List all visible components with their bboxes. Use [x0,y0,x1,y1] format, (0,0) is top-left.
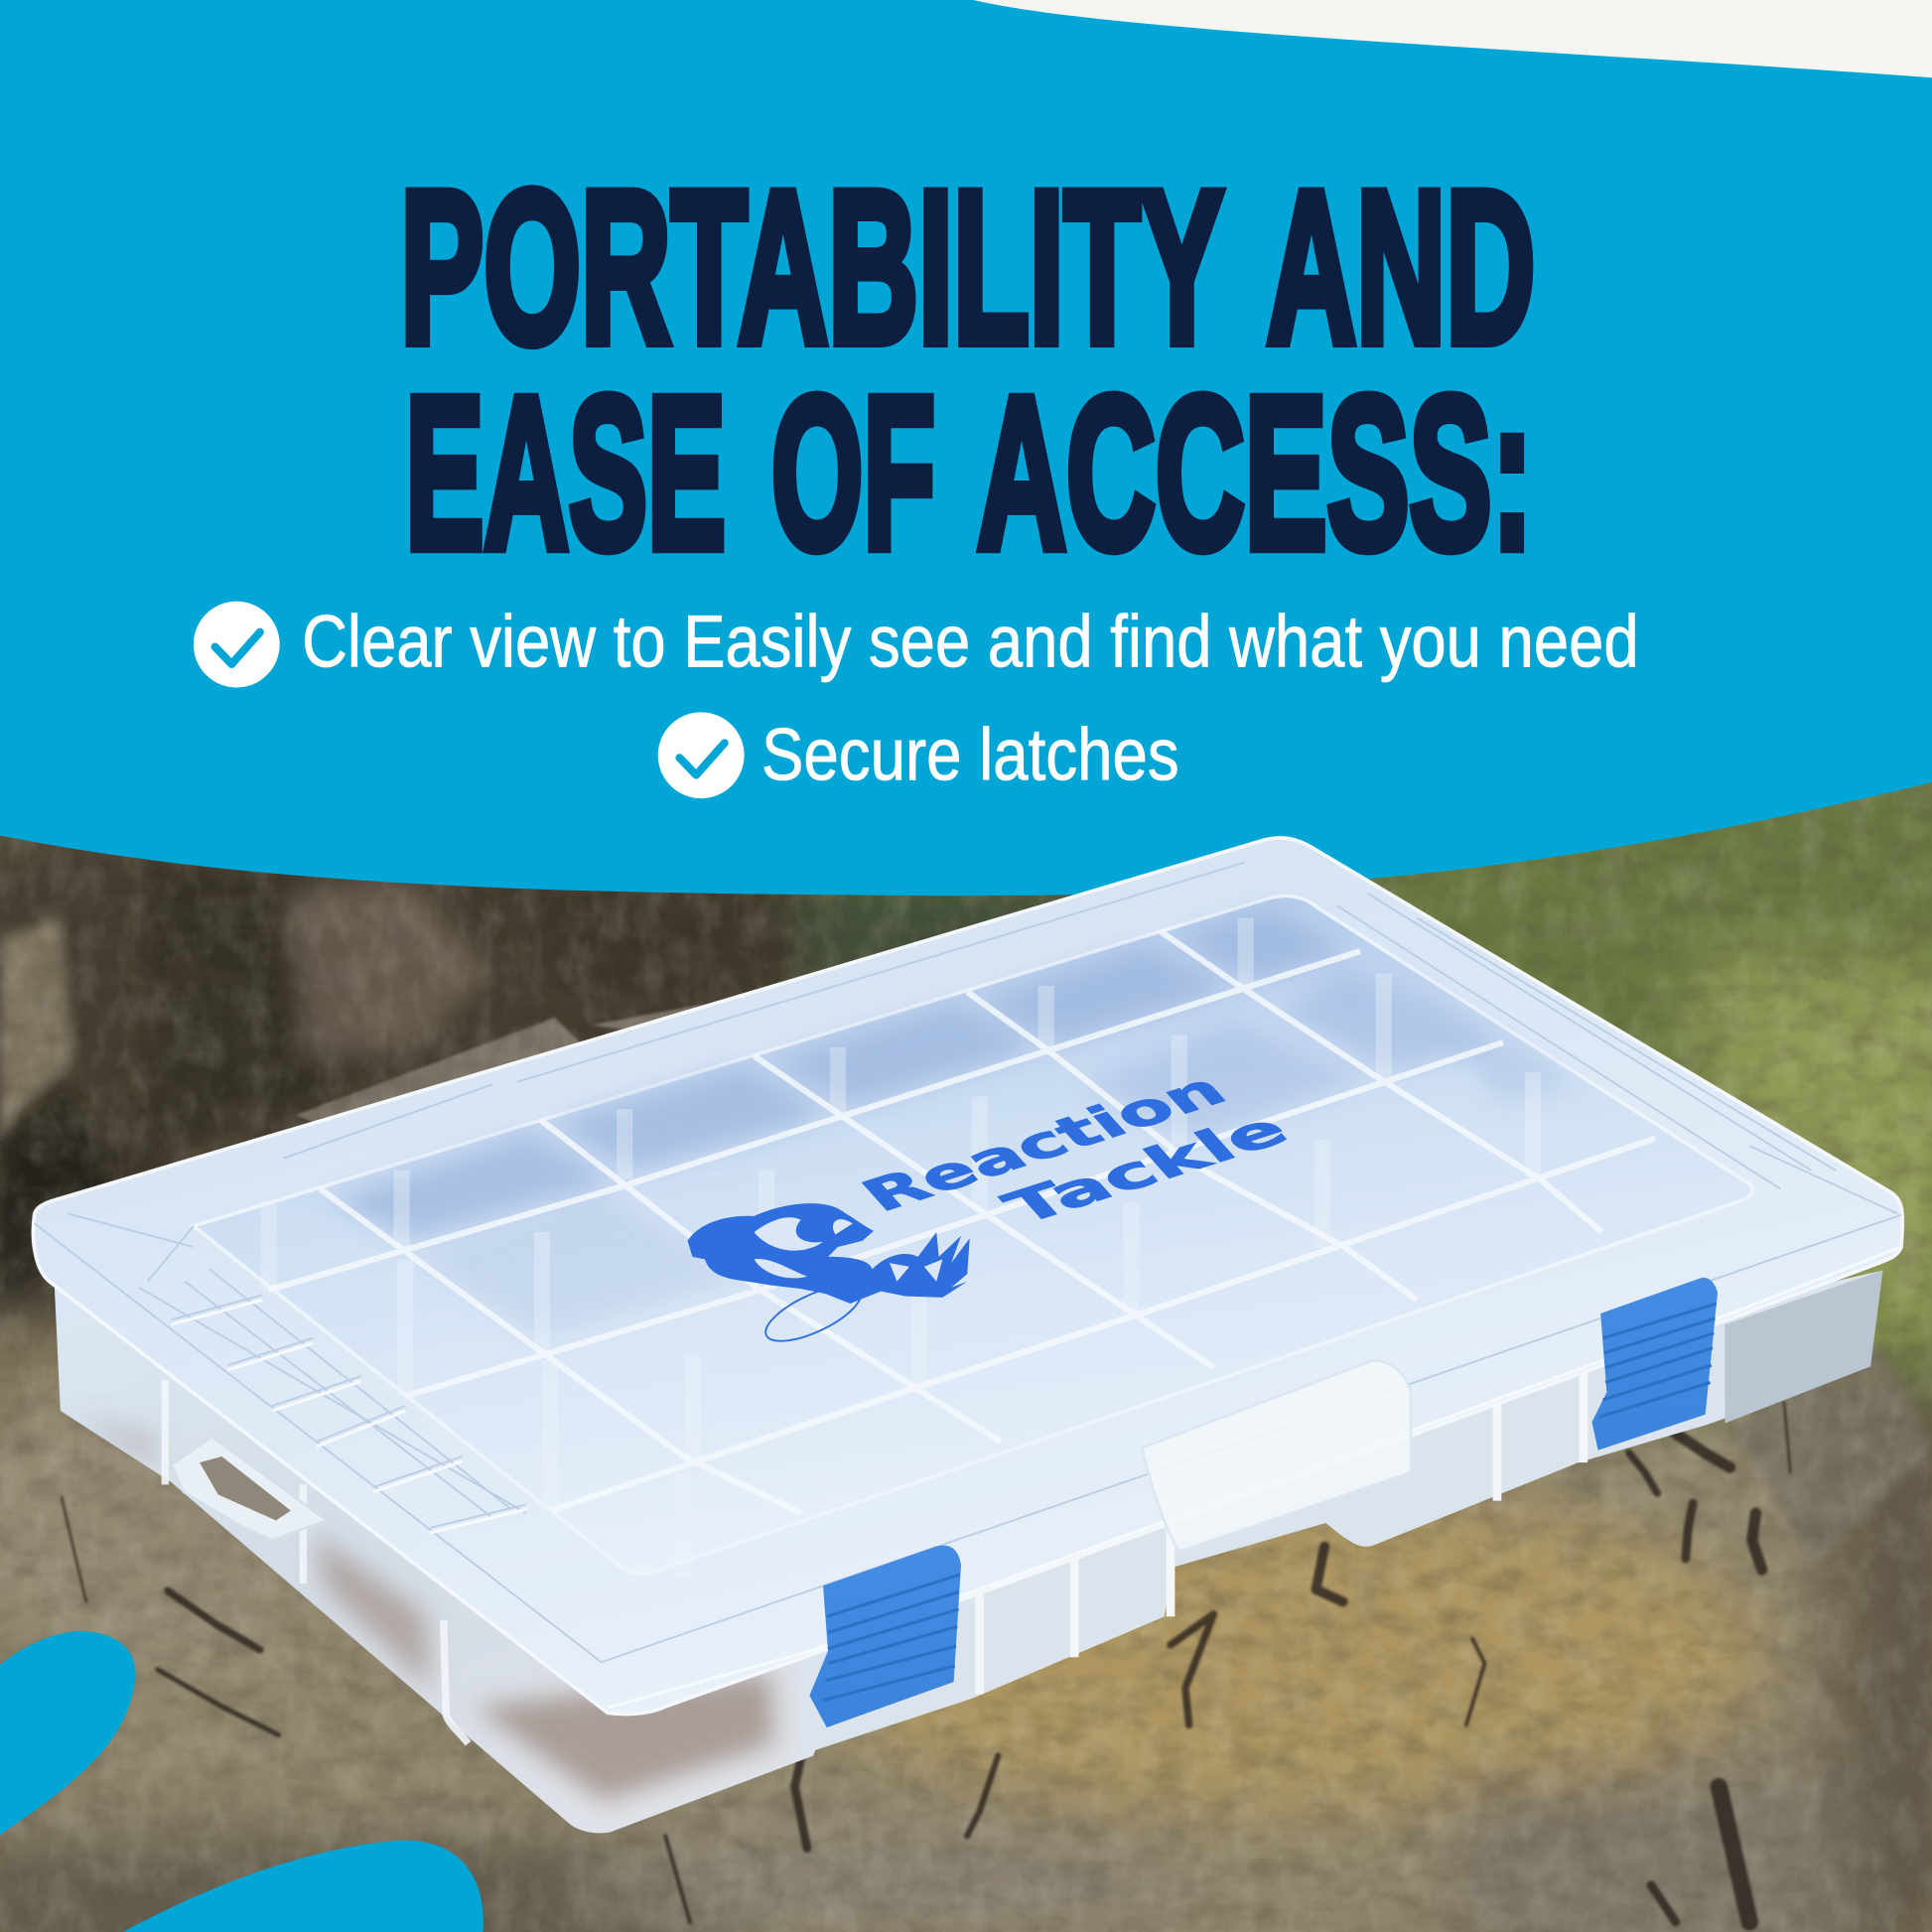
tree trunk bark [148,863,394,1146]
logo wordmark [849,1063,1301,1234]
logo fish [688,1203,970,1304]
bullet text: Secure latches [761,714,1179,796]
title: AND [1267,146,1535,388]
latch: front left [809,1546,961,1727]
title: ACCESS: [977,352,1533,595]
bullet: secure latches [658,712,1179,798]
logo wordmark: Tackle [991,1103,1301,1234]
logo: Reaction Tackle [688,1063,1301,1352]
top-right white textured corner [936,0,1932,111]
logo ellipse line [759,1275,868,1352]
title: PORTABILITY [400,146,1223,388]
title: OF [771,352,935,595]
stump right side rock [1725,1340,1927,1565]
logo wordmark: Reaction [849,1063,1238,1222]
compartment reflections [331,909,1578,1337]
bark and stump texture [0,788,1932,1932]
blue corner blob: bottom [123,1841,483,1932]
case right compartment [1725,1271,1882,1423]
stump seen through case [73,1417,773,1801]
title [400,146,1535,595]
icon: check circle [194,602,280,688]
latch: front right [1591,1278,1718,1450]
lid [33,838,1902,1715]
lid rim lines [35,863,1901,1662]
case lower wall: left side [55,1282,863,1833]
title: EASE [405,352,726,595]
icon: check circle [658,712,745,798]
product: clear tackle box [33,838,1902,1833]
blue corner blob: left [0,1631,136,1835]
bullet text: Clear view to Easily see and find what you need [302,600,1639,682]
stump cracks [62,1402,1790,1922]
compartment dividers [269,931,1655,1513]
case wall dividers [165,1380,469,1743]
lid window [194,896,1752,1574]
bullet: clear view [194,600,1639,688]
carry handle front [1142,1361,1411,1552]
vertical compartment walls [269,918,1533,1578]
side tab handle [172,1437,327,1540]
case lower wall: front side [798,1271,1882,1756]
stump back rim [296,1004,702,1146]
front dividers [980,1361,1584,1694]
blue header band [0,0,1932,896]
